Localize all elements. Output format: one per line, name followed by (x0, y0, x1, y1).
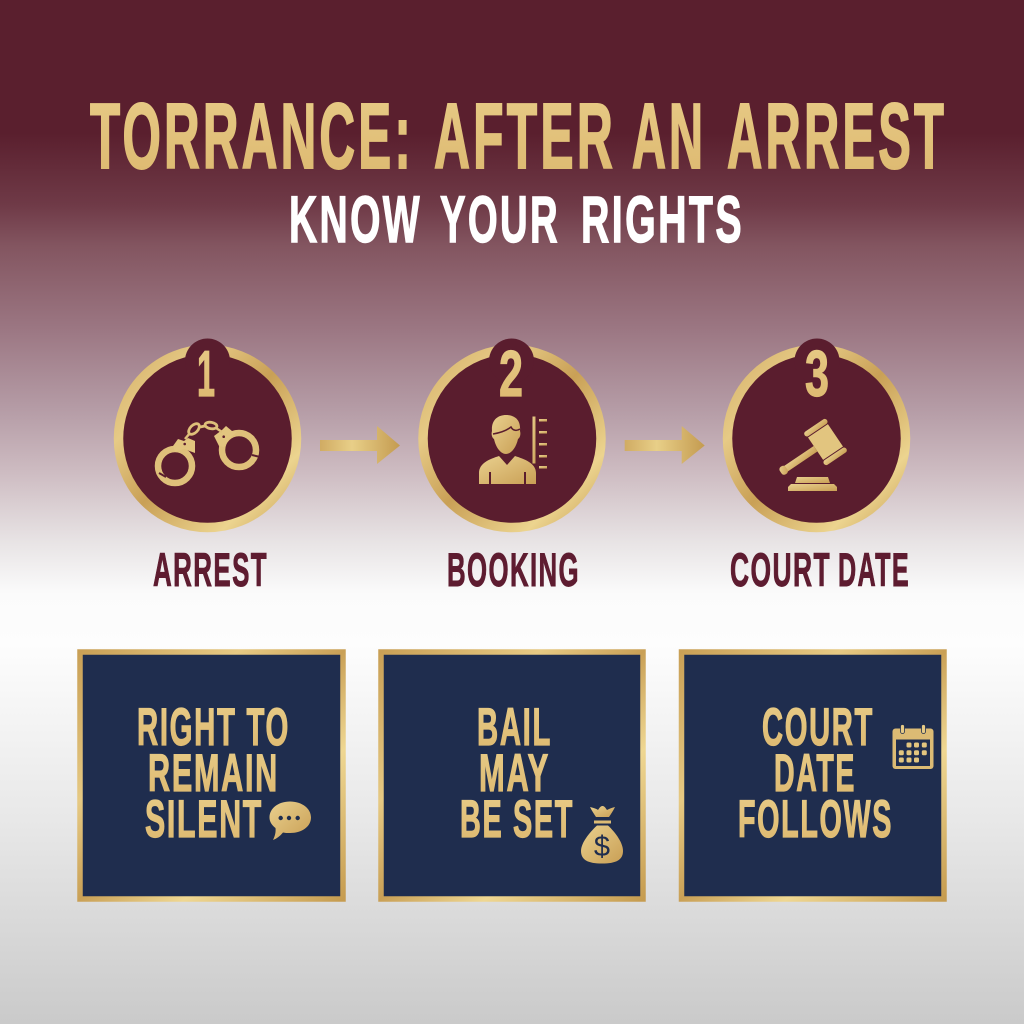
step 2: booking (423, 337, 601, 528)
panel text: RIGHT TO (137, 698, 290, 757)
gold ring (728, 350, 906, 528)
panel text (460, 698, 574, 849)
icon: booking person with height ruler (479, 415, 547, 484)
panel text: BE SET (460, 790, 574, 849)
number badge 1 (185, 337, 230, 410)
panel text: MAY (479, 744, 550, 803)
panel: bail may be set (381, 652, 643, 899)
step 1: arrest (118, 337, 296, 528)
panel text: BAIL (477, 698, 552, 757)
step 3: court date (728, 337, 906, 528)
arrow: step 2 to 3 (625, 426, 705, 464)
number badge 3: 3 (805, 337, 829, 410)
icon: money bag (581, 806, 623, 864)
gold ring (118, 350, 296, 528)
panel text (738, 698, 893, 849)
panel text: FOLLOWS (738, 790, 893, 849)
subtitle: YOUR (440, 182, 560, 256)
panel text: DATE (774, 744, 856, 803)
subtitle (289, 182, 744, 256)
panel text (137, 698, 290, 849)
panel text: SILENT (145, 790, 263, 849)
icon: gavel (770, 418, 848, 491)
arrow: step 1 to 2 (320, 426, 400, 464)
gold ring (423, 350, 601, 528)
number badge 1: 1 (197, 337, 215, 410)
panel: court date follows (682, 652, 944, 899)
icon: speech bubble (270, 802, 311, 840)
subtitle: RIGHTS (581, 182, 744, 256)
title: AN (632, 84, 706, 188)
step label: arrest: ARREST (153, 543, 268, 596)
step label: court date: COURT (730, 543, 831, 596)
step label: booking: BOOKING (447, 543, 580, 596)
title: TORRANCE: (90, 84, 414, 188)
icon: handcuffs (158, 421, 260, 483)
panel text: COURT (762, 698, 874, 757)
number badge 2: 2 (499, 337, 523, 410)
subtitle: KNOW (289, 182, 422, 256)
icon: calendar (892, 724, 934, 769)
step label: court date: DATE (838, 543, 910, 596)
panel: right to remain silent (80, 652, 343, 899)
title: AFTER (434, 84, 616, 188)
icon: money bag: $ (594, 831, 610, 863)
panel text: REMAIN (148, 744, 279, 803)
